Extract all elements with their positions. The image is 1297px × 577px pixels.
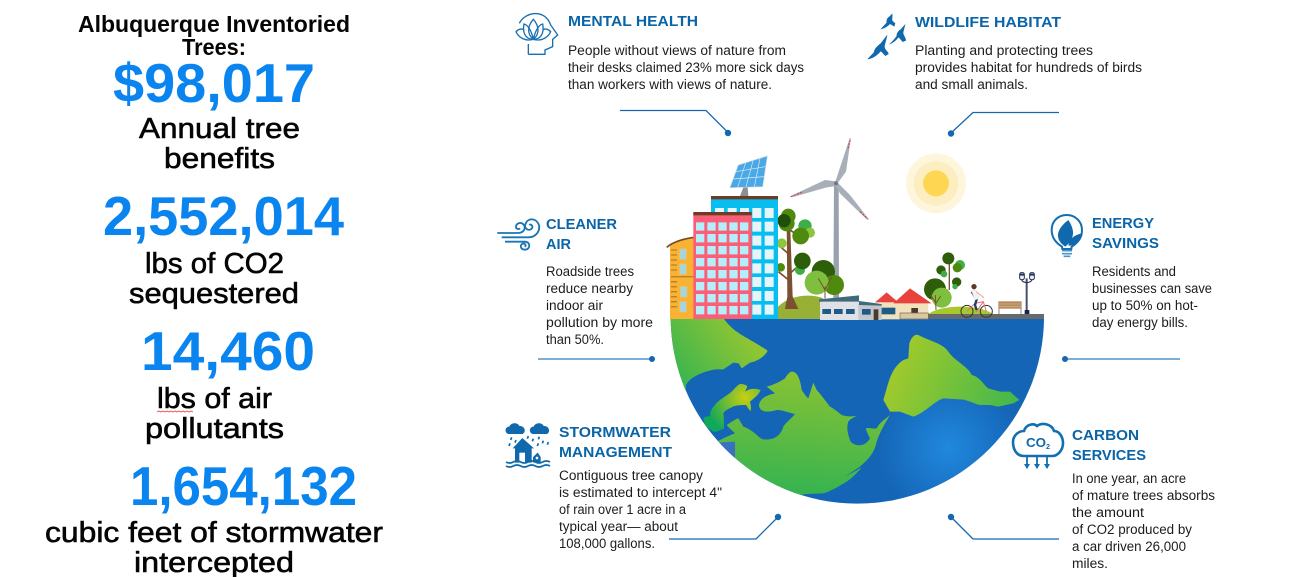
body text: the amount — [1072, 505, 1144, 520]
connector — [669, 514, 781, 539]
body text: provides habitat for hundreds of birds — [915, 60, 1142, 75]
heading: STORMWATER — [559, 425, 672, 441]
body text: indoor air — [546, 298, 604, 313]
panel: carbon services — [948, 424, 1215, 571]
body text: day energy bills. — [1092, 315, 1188, 330]
body text: up to 50% on hot- — [1092, 298, 1198, 313]
panel: energy savings — [1052, 215, 1212, 362]
title: Albuquerque Inventoried — [78, 11, 350, 37]
icon: flooded house — [506, 423, 550, 467]
icon: wind — [497, 219, 539, 250]
icon: lotus head — [516, 14, 558, 54]
street lamp — [1020, 273, 1034, 314]
bench — [998, 301, 1022, 314]
heading — [546, 217, 618, 253]
solar panel — [730, 156, 767, 196]
cyan building — [711, 196, 778, 319]
city skyline — [667, 137, 1044, 320]
panel: cleaner air — [497, 217, 655, 362]
body text: typical year— about — [559, 519, 678, 534]
houses — [819, 288, 932, 320]
stat: air pollutants — [141, 320, 315, 445]
road — [927, 314, 1044, 319]
body text: In one year, an acre — [1072, 471, 1186, 486]
connector — [1062, 356, 1180, 362]
body text: miles. — [1072, 556, 1108, 571]
hill — [778, 296, 823, 319]
body text: reduce nearby — [546, 281, 633, 296]
panel: mental health — [516, 14, 804, 136]
yellow building — [667, 237, 695, 319]
heading: CLEANER — [546, 217, 618, 233]
stat: air pollutants: pollutants — [145, 413, 284, 445]
wind turbine — [791, 137, 868, 298]
body text: Contiguous tree canopy — [559, 468, 703, 483]
icon: CO2 cloud: CO — [1026, 435, 1046, 450]
body text — [546, 264, 653, 347]
body text: pollution by more — [546, 315, 653, 330]
heading: AIR — [546, 237, 572, 253]
heading: ENERGY — [1092, 216, 1154, 232]
icon: CO2 cloud: 2 — [1046, 444, 1050, 451]
panel: wildlife habitat — [867, 13, 1142, 137]
connector — [620, 110, 731, 136]
body text: than workers with views of nature. — [568, 77, 772, 92]
connector — [948, 514, 1059, 539]
body text: is estimated to intercept 4" — [559, 485, 722, 500]
heading — [1092, 216, 1159, 252]
cyclist — [961, 284, 992, 317]
body text — [568, 43, 804, 92]
sun — [906, 153, 966, 213]
heading: CARBON — [1072, 428, 1139, 444]
heading: WILDLIFE HABITAT — [915, 15, 1061, 31]
stat: stormwater intercepted — [45, 455, 383, 577]
right side trees — [924, 252, 993, 314]
body text: of CO2 produced by — [1072, 522, 1192, 537]
stat: annual tree benefits — [113, 52, 315, 175]
body text: of mature trees absorbs — [1072, 488, 1215, 503]
title: Trees: — [182, 34, 246, 60]
title — [78, 11, 350, 60]
stat: CO2 sequestered: sequestered — [129, 278, 299, 310]
left column: statistics — [45, 11, 383, 577]
stat: CO2 sequestered: 2,552,014 — [103, 185, 344, 247]
pink building — [693, 212, 752, 319]
body text: Residents and — [1092, 264, 1176, 279]
heading: SERVICES — [1072, 448, 1146, 464]
body text: a car driven 26,000 — [1072, 539, 1186, 554]
stat: annual tree benefits: Annual tree — [139, 113, 300, 145]
icon: CO2 cloud — [1013, 424, 1063, 469]
body text: businesses can save — [1092, 281, 1212, 296]
body text: their desks claimed 23% more sick days — [568, 60, 804, 75]
tree — [776, 209, 815, 309]
stat: air pollutants: lbs of air — [157, 383, 272, 415]
connector — [948, 112, 1059, 137]
heading — [1072, 428, 1146, 464]
body text — [1092, 264, 1212, 330]
stat: stormwater intercepted: 1,654,132 — [130, 455, 357, 517]
body text: of rain over 1 acre in a — [559, 502, 686, 517]
stat: stormwater intercepted: cubic feet of stormwater — [45, 517, 383, 549]
body text — [915, 43, 1142, 92]
body text — [559, 468, 722, 551]
tree — [805, 260, 844, 298]
body text: Roadside trees — [546, 264, 634, 279]
heading: MANAGEMENT — [559, 445, 672, 461]
body text: 108,000 gallons. — [559, 536, 655, 551]
icon: birds — [867, 13, 906, 59]
connector — [538, 356, 655, 362]
icon: leaf bulb — [1052, 215, 1083, 256]
body text: People without views of nature from — [568, 43, 786, 58]
stat: annual tree benefits: $98,017 — [113, 52, 315, 114]
panel: stormwater management — [506, 423, 781, 551]
body text: and small animals. — [915, 77, 1028, 92]
stat: CO2 sequestered: lbs of CO2 — [145, 248, 284, 280]
globe — [667, 319, 1045, 506]
stat: air pollutants: 14,460 — [141, 320, 315, 382]
body text — [1072, 471, 1215, 571]
stat: CO2 sequestered — [103, 185, 344, 310]
heading: MENTAL HEALTH — [568, 14, 698, 30]
body text: Planting and protecting trees — [915, 43, 1093, 58]
body text: than 50%. — [546, 332, 604, 347]
heading — [559, 425, 672, 461]
stat: annual tree benefits: benefits — [164, 143, 275, 175]
heading: SAVINGS — [1092, 236, 1159, 252]
